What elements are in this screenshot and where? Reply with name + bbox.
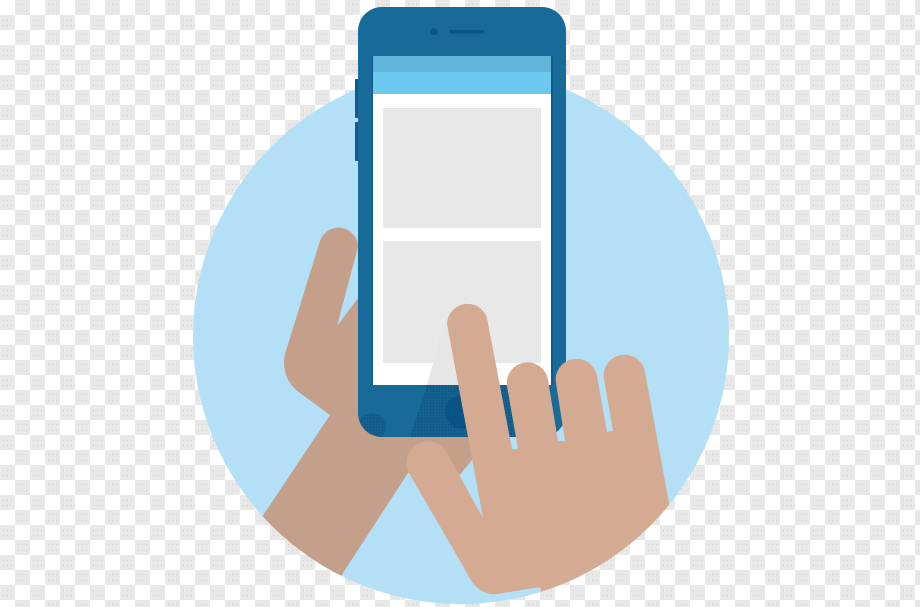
- second thumb shadow on phone corner: [360, 413, 386, 437]
- phone body: [358, 7, 566, 437]
- light blue circle: [193, 68, 729, 604]
- content card bottom: [383, 241, 541, 363]
- screen header band: [373, 56, 551, 94]
- back hand holding the phone: [262, 228, 472, 576]
- speaker and camera: [430, 28, 484, 35]
- side buttons: [355, 79, 360, 161]
- finger shadow on screen: [427, 320, 476, 385]
- screen: [372, 56, 553, 385]
- smartphone: [355, 7, 566, 441]
- content card top: [383, 108, 541, 228]
- screen header darker strip: [373, 56, 551, 72]
- front hand pointing at screen: [407, 304, 680, 600]
- home button: [445, 395, 479, 429]
- screen edge: [372, 56, 553, 385]
- finger shadow on phone bezel: [410, 385, 525, 437]
